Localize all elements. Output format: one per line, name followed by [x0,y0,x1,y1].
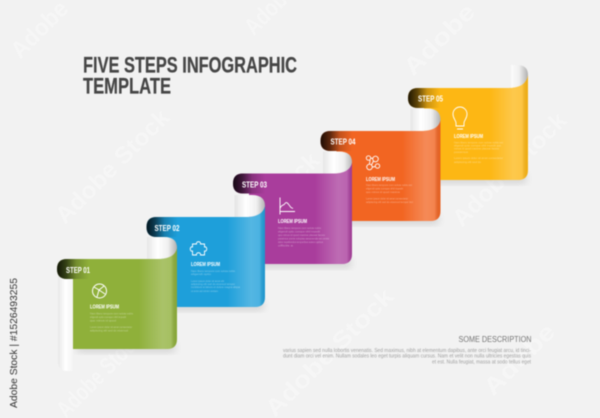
step 1 panel: quo minus id quod [90,318,116,322]
step 5 panel: eligendi optio cumque nihil impedit quo [454,144,501,148]
step 3 panel: Nam libero tempore cum soluta nobis [278,226,321,230]
step 2 panel: Lorem ipsum dolor sit amet elit [191,279,224,283]
step 5 panel: minus id quod maxime placeat facere [454,146,499,150]
step 2 panel: Nam libero tempore cum soluta nobis [191,269,235,273]
step 1 panel: STEP 01 [66,265,90,275]
step 5 panel: STEP 05 [418,94,443,104]
watermarks: Adobe Stock [50,104,176,229]
step 4 panel: quo minus id quod maxime [366,190,400,194]
watermarks: Adobe [478,318,561,401]
step 3 panel [233,152,352,268]
description text: dunt diam orci vel enim. Nullam sodales leo eget turpis aliquam cursus. Nam et velit non nulla ultricies egestas quis [283,354,531,360]
step 1 panel: Lorem ipsum dolor sit amet consectetur [90,325,132,329]
step 1 panel: eligendi optio cumque nihil impedit [90,315,126,319]
icon: globe [92,284,106,298]
step 3 panel: quo minus id quod maxime placeat facere [278,233,325,237]
step 5 panel [408,65,528,183]
step 4 panel: Lorem ipsum dolor sit amet consectetur [366,196,408,200]
description text: et est. Nulla feugiat, massa at sodo tellus eget [432,360,532,366]
icon: puzzle piece [190,242,207,255]
title: TEMPLATE [83,74,171,98]
step 5 panel: Nam libero tempore cum soluta nobis est [454,140,503,144]
watermarks: Adobe Stock [200,147,326,272]
step 5 panel: adipiscing elit sed do [454,160,481,164]
description heading: SOME DESCRIPTION [458,335,532,344]
step 2 panel: STEP 02 [154,223,180,233]
stock credit: Adobe Stock | #1526493255 [8,278,20,408]
step 2 panel: eligendi optio [191,272,211,276]
step 1 panel [57,237,177,371]
step 4 panel: Nam libero tempore cum soluta nobis est [366,183,412,187]
step 4 panel: eligendi optio cumque nihil impedit [366,186,403,190]
step 5 panel: possimus [454,150,469,154]
step 4 panel: LOREM IPSUM [366,177,395,183]
watermarks: Adobe Stock [447,107,573,232]
description text [283,348,532,366]
step 2 panel [146,195,265,310]
step 3 panel: STEP 03 [242,180,267,190]
step 3 panel: LOREM IPSUM [278,219,307,225]
icon: molecules [366,156,380,170]
step 2 panel: LOREM IPSUM [191,262,220,268]
title [83,52,297,98]
step 3 panel: dolor repellendus temporibus autem quibus [278,240,323,244]
step 4 panel [320,108,440,224]
step 1 panel: Nam libero tempore cum soluta nobis [90,312,133,316]
step 1 panel: adipiscing elit sed do eiusmod [90,328,128,332]
step 3 panel: eligendi optio cumque nihil impedit [278,230,320,234]
step 3 panel: possimus omnis voluptas assumenda est omnis [278,236,329,240]
icon: light bulb [453,107,467,129]
step 4 panel: STEP 04 [330,136,356,146]
step 2 panel: ut enim ad minim veniam [191,289,218,293]
icon: line chart [280,198,295,214]
step 5 panel: Lorem ipsum dolor sit amet consectetur [454,156,503,160]
step 1 panel: LOREM IPSUM [90,304,119,310]
title: FIVE STEPS INFOGRAPHIC [83,52,297,78]
white side curl [58,273,73,371]
watermarks: Adobe [398,0,481,81]
step 3 panel: officiis a [278,244,293,248]
step 2 panel: adipiscing elit sed do eiusmod tempor [191,282,235,286]
description text: varius sapien sed nulla lobortis venenatis. Sed maximus, nibh at elementum dapibus, ante orci feugiat arcu, id tinci- [283,348,531,354]
step 4 panel: adipiscing elit sed do eiusmod tempor inci [366,200,413,204]
step 2 panel: incididunt ut labore et dolore magna aliqua [191,285,240,289]
step 5 panel: LOREM IPSUM [454,134,483,140]
